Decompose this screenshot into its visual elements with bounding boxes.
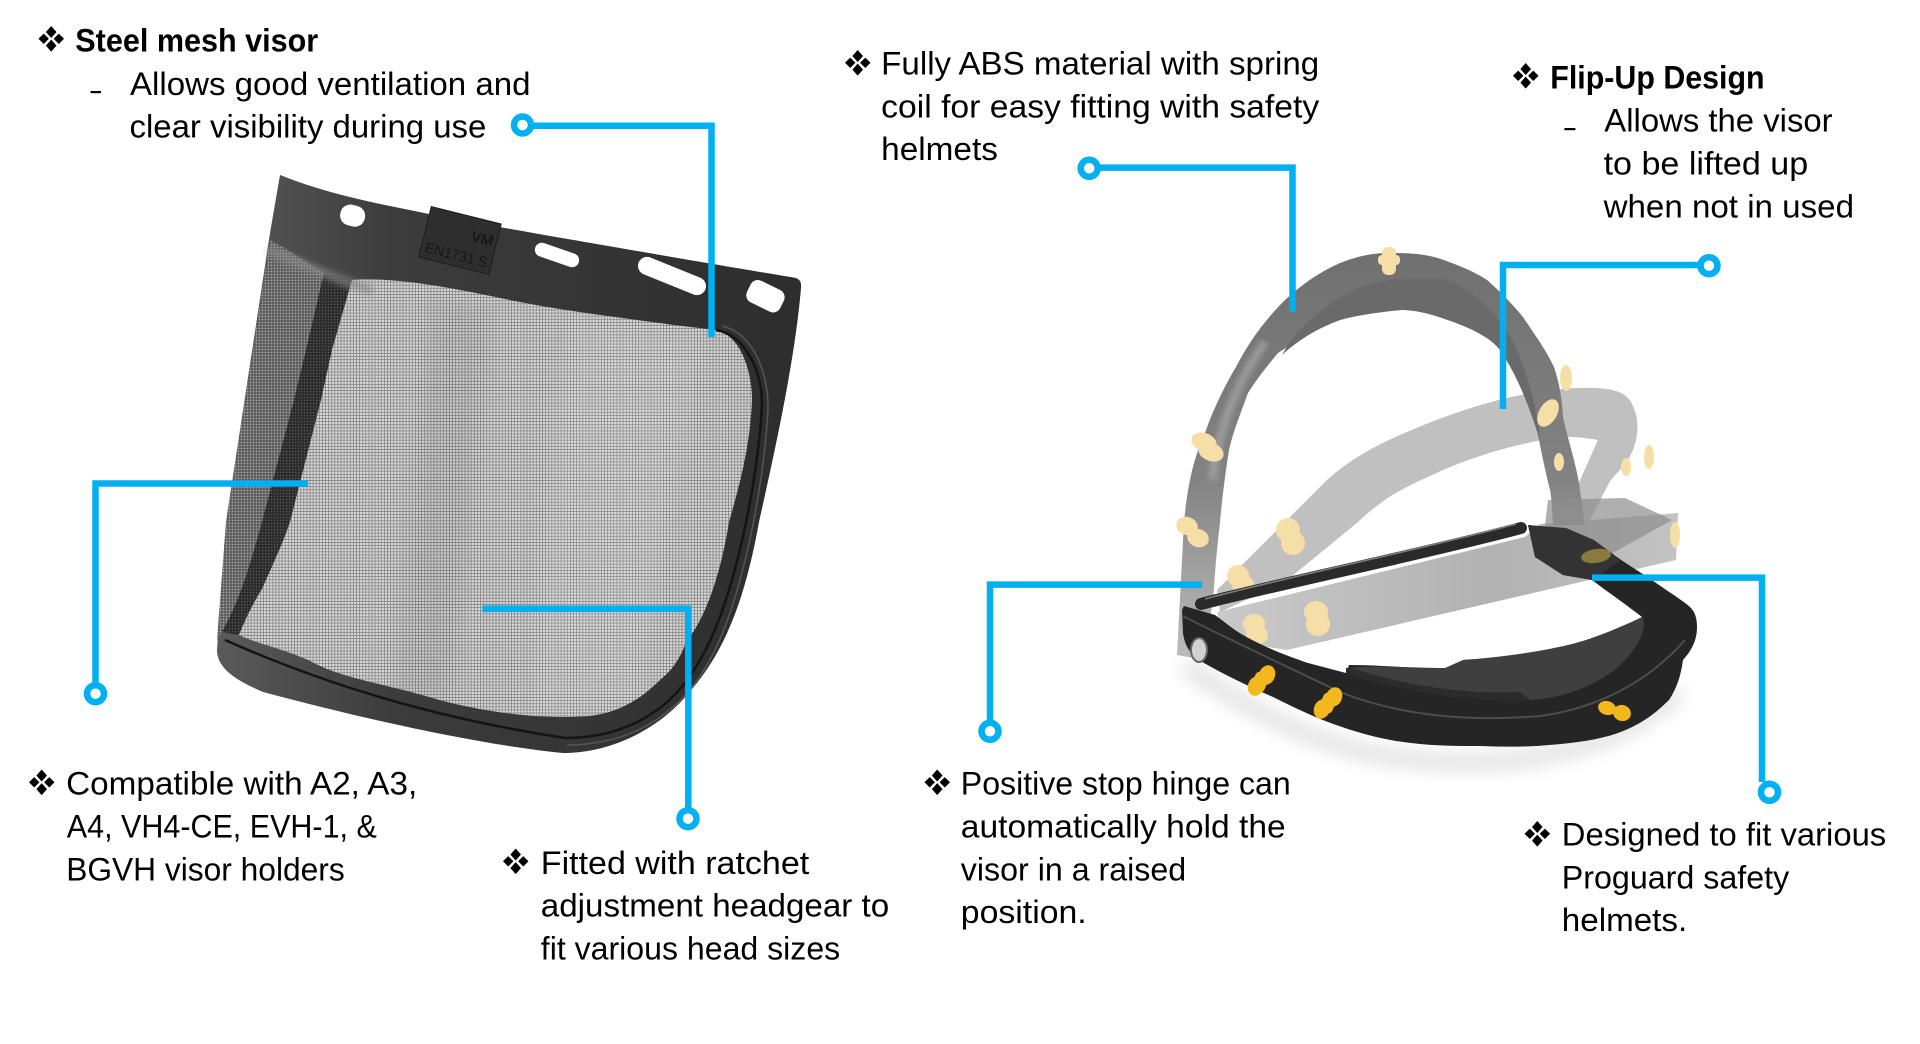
bullet icon (29, 770, 54, 795)
bullet icon (38, 26, 64, 52)
image: steel mesh visor (217, 175, 801, 753)
bullet icon (503, 848, 528, 874)
main mesh panel (239, 279, 752, 717)
text block: ABS material (845, 46, 1319, 167)
ground shadow (1185, 665, 1680, 762)
bullet icon (1525, 821, 1550, 847)
description: Fully ABS material with spring (881, 46, 1319, 82)
middle carrier ghost (1217, 388, 1638, 612)
raised headband arch (1177, 253, 1585, 660)
heading: Steel mesh visor (75, 23, 318, 59)
description: Allows good ventilation and (130, 66, 530, 102)
side mesh (217, 240, 324, 640)
callout: steel mesh visor (514, 116, 712, 337)
embossed label: VM (469, 228, 495, 250)
callout: positive stop hinge (982, 585, 1202, 740)
carrier upper rim (1183, 616, 1685, 718)
callout: compatible holders (87, 484, 308, 702)
text block: flip-up design: when not in used (1603, 188, 1854, 224)
text block: ABS material: coil for easy fitting with safety (881, 88, 1319, 124)
text block: ratchet headgear: fit various head sizes (541, 930, 840, 966)
visor frame (217, 175, 801, 753)
heading: Flip-Up Design (1550, 59, 1765, 95)
text block: fits proguard helmets: Proguard safety (1562, 859, 1789, 895)
text block: ratchet headgear (503, 845, 889, 966)
text block: positive stop hinge: automatically hold the (961, 808, 1286, 844)
text block: positive stop hinge: visor in a raised (961, 851, 1186, 887)
description: Fitted with ratchet (541, 845, 809, 881)
callout: flip-up design (1503, 257, 1718, 409)
dash (91, 91, 101, 93)
description: Positive stop hinge can (961, 766, 1291, 802)
image: flip-up headgear (1174, 247, 1697, 762)
faded knobs (1174, 247, 1680, 644)
text block: flip-up design: to be lifted up (1604, 145, 1808, 181)
embossed label (419, 207, 501, 274)
text block: positive stop hinge: position. (961, 894, 1087, 930)
text block: flip-up design (1513, 59, 1854, 224)
description: Compatible with A2, A3, (66, 766, 417, 802)
description: Allows the visor (1604, 103, 1833, 139)
text block: fits proguard helmets: helmets. (1562, 902, 1687, 938)
text block: compatible holders: BGVH visor holders (66, 851, 345, 887)
arch front highlight (1212, 342, 1265, 480)
callout: ratchet headgear (482, 609, 696, 827)
callout: ABS material (1081, 160, 1292, 312)
embossed label: EN1731 S (423, 240, 489, 272)
yellow adjuster knobs (1245, 663, 1633, 723)
bullet icon (1513, 63, 1538, 89)
frame grooves (225, 330, 762, 738)
text block: ABS material: helmets (881, 131, 998, 167)
hinge block (1528, 525, 1621, 580)
text block: steel mesh visor: clear visibility during use (130, 108, 486, 144)
lowest visor carrier ghost (1217, 513, 1678, 650)
black visor carrier (1182, 525, 1697, 747)
inner headband strip (1282, 278, 1540, 440)
dash (1564, 128, 1575, 130)
mounting slots (338, 202, 787, 315)
text block: steel mesh visor (38, 23, 530, 145)
text block: ratchet headgear: adjustment headgear to (541, 887, 889, 923)
inner padding (1346, 617, 1644, 700)
hinge bolt (1191, 638, 1207, 662)
text block: compatible holders (29, 766, 417, 887)
text block: fits proguard helmets (1525, 817, 1886, 938)
dark mesh band (222, 273, 352, 635)
bullet icon (924, 770, 950, 795)
description: Designed to fit various (1562, 817, 1886, 853)
frame highlight (268, 250, 372, 290)
text block: compatible holders: A4, VH4-CE, EVH-1, & (67, 808, 377, 844)
callout: fits proguard helmets (1592, 578, 1778, 801)
text block: positive stop hinge (924, 766, 1291, 930)
mesh shading (402, 308, 636, 697)
hinge ghost (1545, 498, 1672, 560)
bullet icon (845, 50, 870, 76)
top spring bar (1201, 528, 1521, 604)
